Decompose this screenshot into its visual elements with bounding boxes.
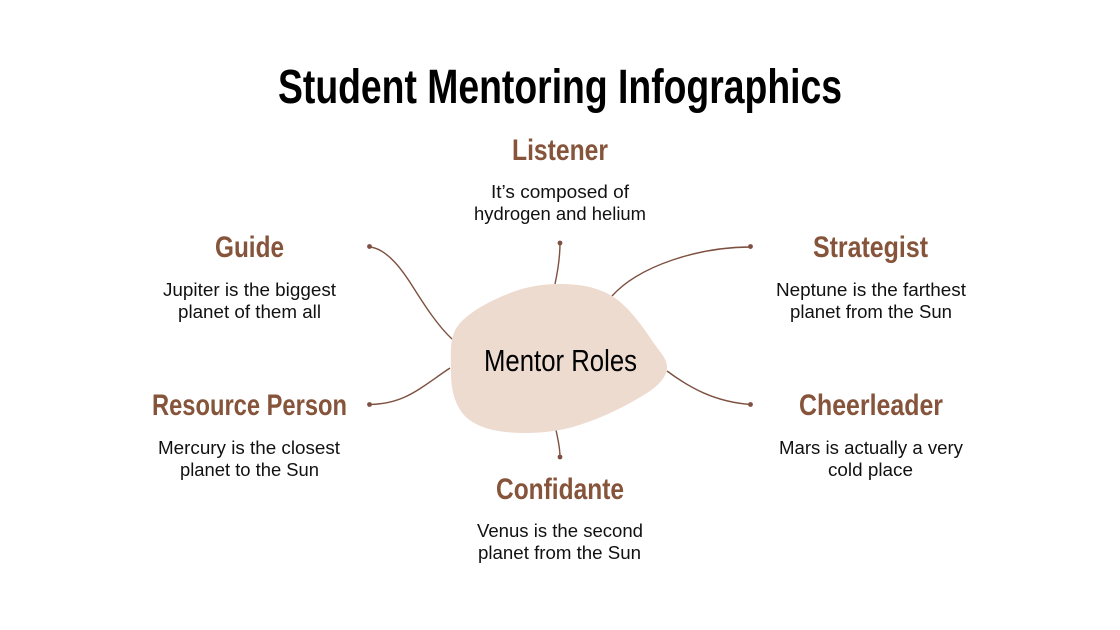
panel: guide: planet of them all (178, 301, 321, 322)
panel: cheerleader: Mars is actually a very (779, 437, 964, 458)
connector: guide (367, 244, 452, 339)
connector: listener (555, 241, 562, 284)
panel: cheerleader: cold place (828, 459, 913, 480)
panel: guide: Guide (215, 231, 284, 264)
panel: resource person: Resource Person (152, 389, 347, 422)
central blob: mentor roles: Mentor Roles (484, 343, 637, 378)
panel: guide: Jupiter is the biggest (163, 279, 336, 300)
panel: strategist: Strategist (813, 231, 928, 264)
connector: cheerleader (667, 371, 753, 407)
panel: strategist: Neptune is the farthest (776, 279, 966, 300)
panel: confidante: planet from the Sun (478, 542, 641, 563)
panel: cheerleader: Cheerleader (799, 389, 943, 422)
panel: listener: It’s composed of (491, 181, 630, 202)
connector: resource person (367, 368, 450, 407)
title: Student Mentoring Infographics (278, 61, 842, 114)
panel: strategist (776, 231, 966, 322)
central blob: mentor roles (451, 284, 667, 433)
panel: cheerleader (779, 389, 964, 480)
panel: listener (474, 134, 646, 224)
connector: confidante (556, 430, 562, 459)
panel: listener: Listener (512, 134, 608, 167)
panel: strategist: planet from the Sun (790, 301, 952, 322)
panel: listener: hydrogen and helium (474, 203, 646, 224)
panel: guide (163, 231, 336, 322)
panel: resource person: planet to the Sun (180, 459, 319, 480)
panel: confidante: Confidante (496, 473, 624, 506)
panel: confidante: Venus is the second (477, 520, 643, 541)
connector: strategist (612, 244, 753, 296)
panel: resource person (152, 389, 347, 480)
panel: resource person: Mercury is the closest (158, 437, 340, 458)
panel: confidante (477, 473, 643, 563)
